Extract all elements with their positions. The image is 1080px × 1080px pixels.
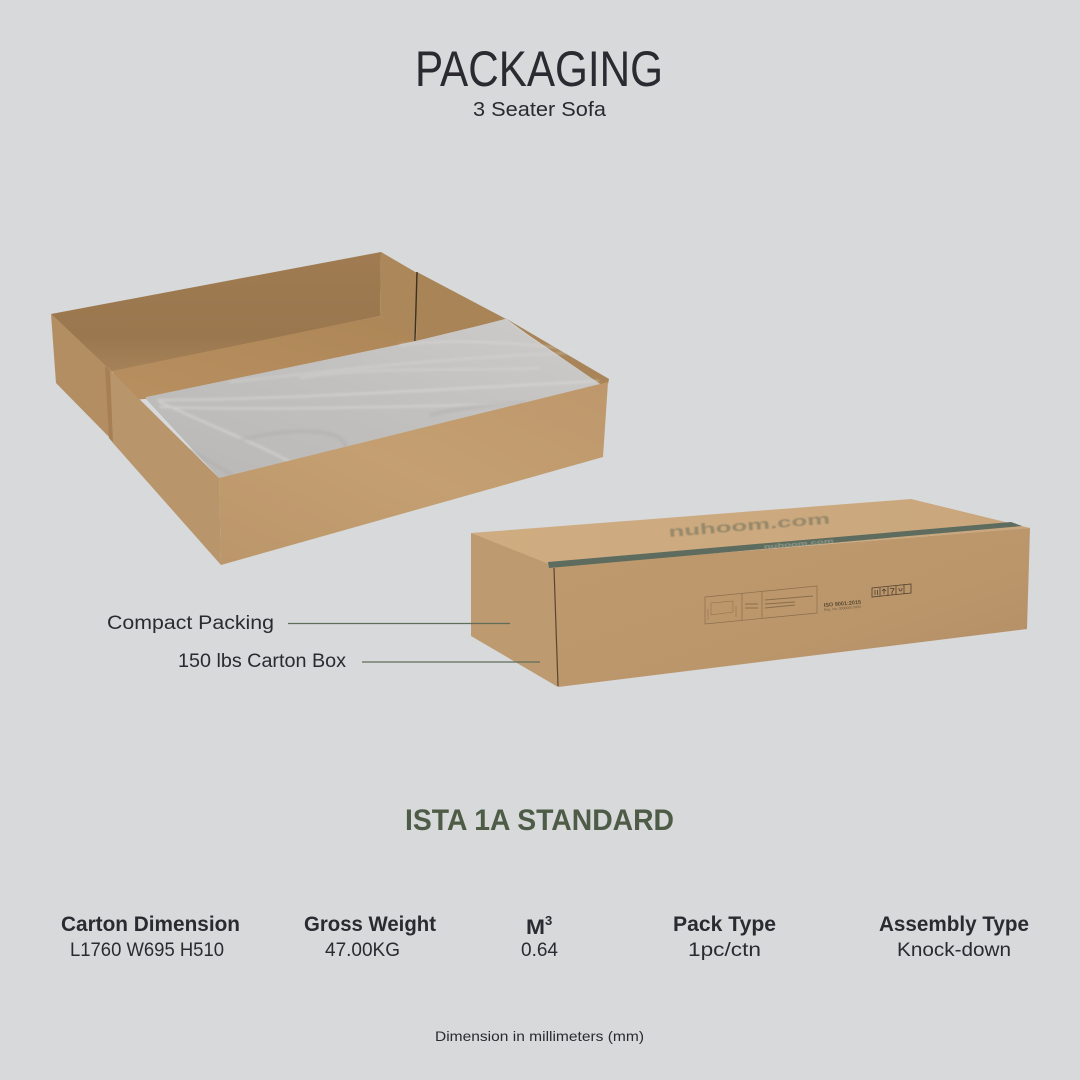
spec: cubic meters: 0.64 xyxy=(521,940,558,961)
right inner corner flap xyxy=(380,252,417,341)
back inner wall xyxy=(51,252,381,372)
carton long side xyxy=(554,528,1030,687)
carton edge seam xyxy=(554,568,558,686)
plastic wrapped sofa xyxy=(146,319,600,479)
standard heading: ISTA 1A STANDARD xyxy=(405,804,674,837)
title: PACKAGING xyxy=(415,41,663,97)
printed ISO mark: Reg. No. 0000000 0000 xyxy=(824,605,861,612)
photo: open carton with wrapped sofa xyxy=(51,252,609,565)
spec: gross weight: Gross Weight xyxy=(304,913,436,936)
callout: Compact Packing: Compact Packing xyxy=(107,613,274,634)
spec: gross weight: 47.00KG xyxy=(325,940,400,961)
spec: gross weight xyxy=(304,913,436,961)
spec: cubic meters: M xyxy=(526,916,545,939)
spec: pack type xyxy=(673,913,776,961)
spec: assembly type: Knock-down xyxy=(897,940,1011,961)
right inner edge strip xyxy=(505,318,609,384)
printed handling symbols xyxy=(872,584,911,597)
spec: pack type: 1pc/ctn xyxy=(688,940,761,961)
left front outer panel xyxy=(110,370,221,565)
spec: carton dimension xyxy=(61,913,240,961)
left rear outer panel xyxy=(51,314,110,438)
spec: assembly type: Assembly Type xyxy=(879,913,1029,936)
callout: 150 lbs Carton Box: 150 lbs Carton Box xyxy=(178,651,347,672)
spec: carton dimension: Carton Dimension xyxy=(61,913,240,936)
footnote: Dimension in millimeters (mm) xyxy=(435,1028,644,1044)
carton top xyxy=(471,499,1030,566)
subtitle: 3 Seater Sofa xyxy=(473,99,607,121)
spec: cubic meters: 3 xyxy=(545,913,552,928)
spec: carton dimension: L1760 W695 H510 xyxy=(70,940,224,961)
printed product label xyxy=(705,586,817,624)
film shadow folds xyxy=(190,403,525,475)
printed brand on top: nuhoom.com xyxy=(668,509,831,541)
spec: pack type: Pack Type xyxy=(673,913,776,936)
carton left end xyxy=(471,533,558,687)
flap slit xyxy=(415,272,417,341)
printed ISO mark: ISO 9001:2015 xyxy=(824,600,861,609)
spec: assembly type xyxy=(879,913,1029,961)
printed brand on tape: nuhoom.com xyxy=(764,538,834,550)
tape strip xyxy=(105,366,114,444)
carton floor xyxy=(112,316,416,400)
film wrinkles xyxy=(158,342,598,463)
front outer panel xyxy=(219,382,608,565)
photo: closed carton xyxy=(471,499,1030,687)
spec: cubic meters xyxy=(521,913,558,961)
green tape strip xyxy=(548,522,1022,568)
right inner wall xyxy=(416,272,506,341)
spec table xyxy=(61,913,1029,961)
